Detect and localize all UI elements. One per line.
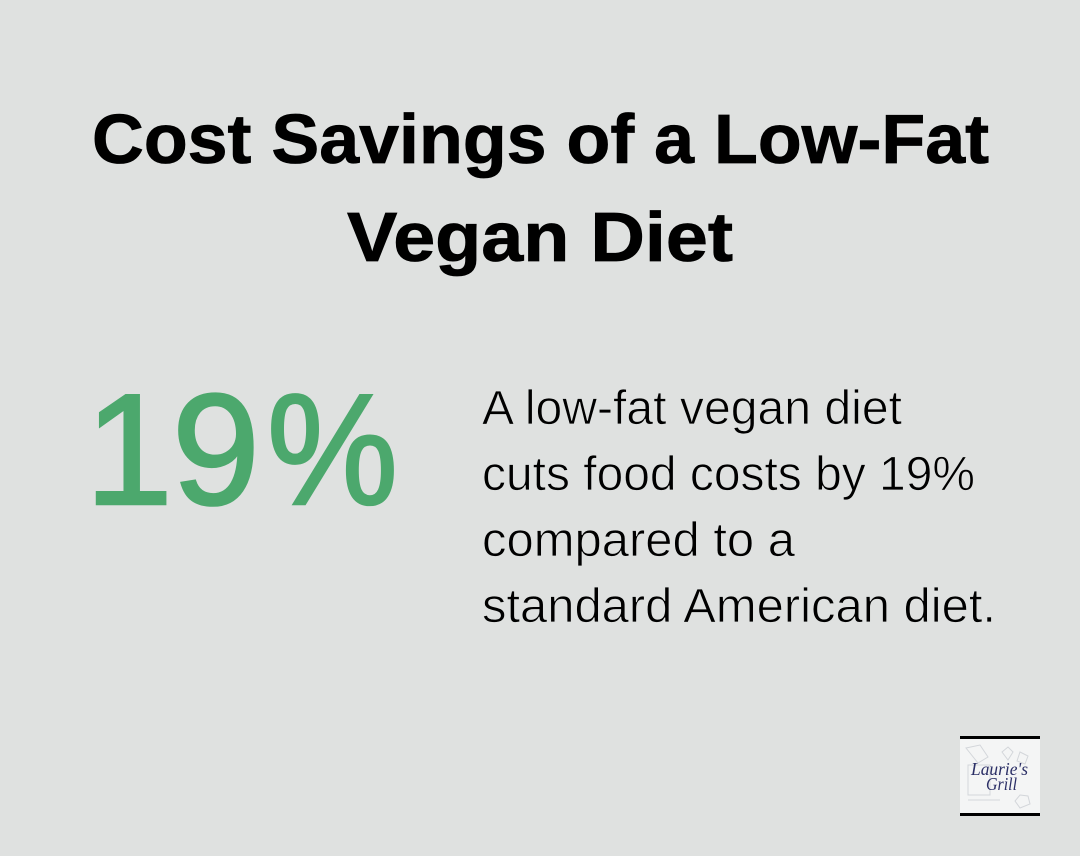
title: Cost Savings of a Low-Fat — [92, 100, 989, 178]
title — [92, 100, 989, 276]
big statistic: 19%: 9 — [172, 362, 260, 538]
description text — [482, 382, 996, 633]
big statistic: 19%: 1 — [85, 362, 173, 538]
description text: A low-fat vegan diet — [482, 382, 902, 435]
description text: standard American diet. — [482, 580, 996, 633]
big statistic: 19%: % — [267, 362, 398, 538]
description text: cuts food costs by 19% — [482, 448, 975, 501]
description text: compared to a — [482, 514, 795, 567]
logo: Laurie's Grill: Grill — [986, 774, 1017, 794]
big statistic: 19% — [85, 362, 398, 538]
logo: Laurie's Grill: Laurie's — [970, 759, 1028, 779]
title: Vegan Diet — [347, 198, 733, 276]
logo: Laurie's Grill — [960, 736, 1040, 816]
